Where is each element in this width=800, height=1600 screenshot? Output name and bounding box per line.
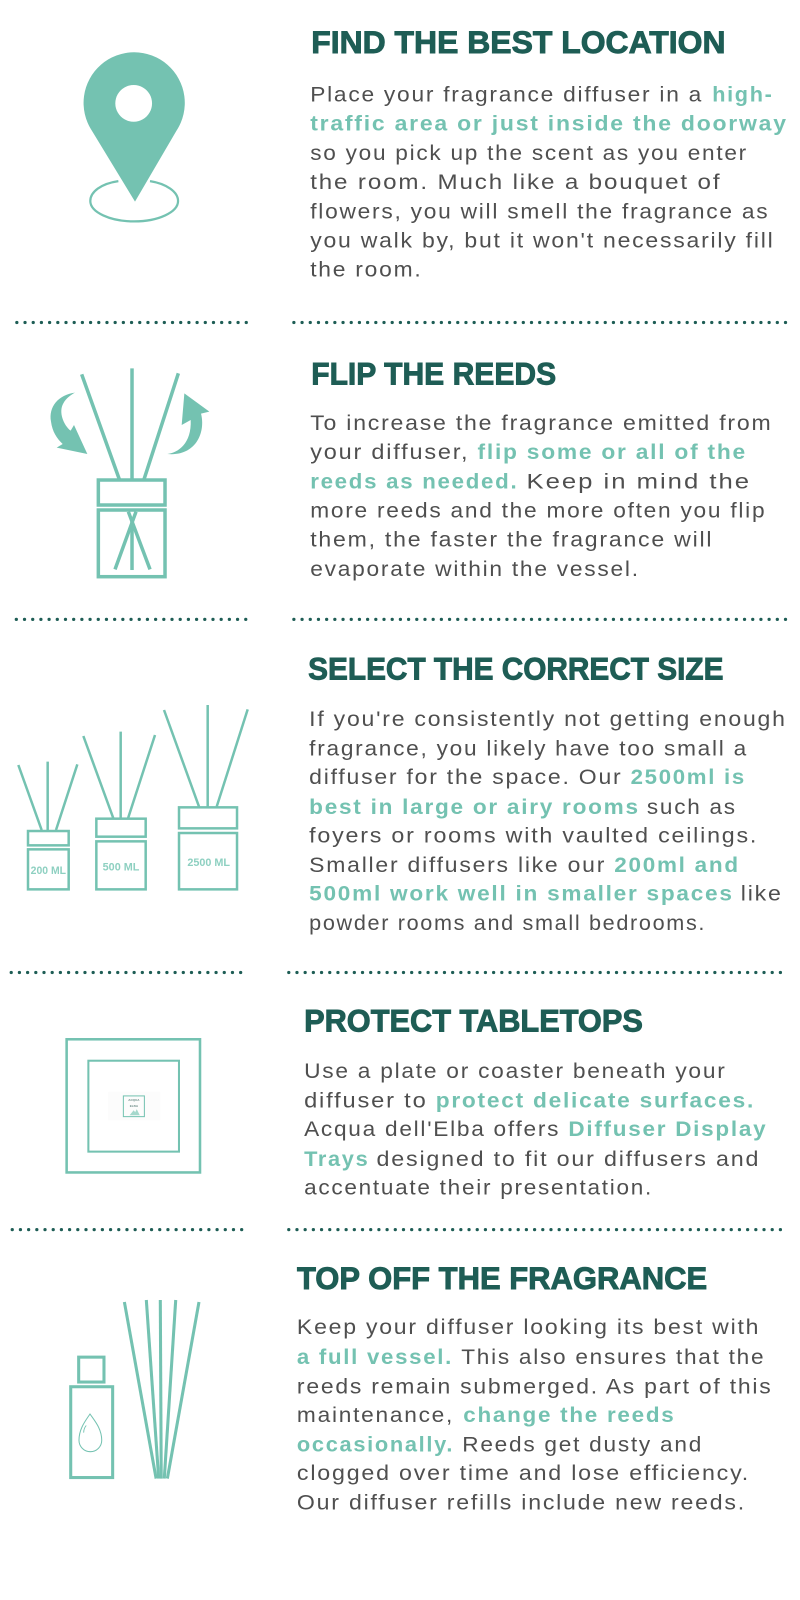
text block: foyers or rooms with vaulted ceilings.: [309, 824, 758, 847]
text block: maintenance,: [297, 1404, 454, 1427]
icon: arrow down: [51, 393, 87, 454]
text block: flowers, you will smell the fragrance as: [310, 200, 769, 223]
text block: more reeds and the more often you flip: [310, 499, 766, 522]
text block: This also ensures that the: [461, 1346, 765, 1369]
text block: [309, 708, 787, 935]
text block: Diffuser Display: [568, 1118, 767, 1141]
text block: change the reeds: [463, 1404, 676, 1427]
text block: Keep your diffuser looking its best with: [297, 1316, 760, 1339]
text block: reeds as needed.: [310, 470, 518, 493]
text block: To increase the fragrance emitted from: [310, 412, 772, 435]
text block: protect delicate surfaces.: [436, 1090, 755, 1113]
icon: display tray: ELBA: [130, 1104, 139, 1108]
text block: them, the faster the fragrance will: [310, 528, 713, 551]
text block: Use a plate or coaster beneath your: [304, 1060, 727, 1083]
icon: location pin: [84, 52, 185, 221]
text block: flip some or all of the: [478, 441, 747, 464]
icon: diffuser with flip arrows: [51, 368, 209, 577]
icon: three diffuser sizes: 200 ML: [31, 865, 66, 877]
text block: traffic area or just inside the doorway: [310, 113, 788, 136]
text block: best in large or airy rooms: [309, 796, 640, 819]
text block: such as: [647, 796, 737, 819]
text block: fragrance, you likely have too small a: [309, 738, 748, 761]
text block: [310, 412, 772, 581]
heading: PROTECT TABLETOPS: [304, 1003, 643, 1039]
panel: select the correct size: [18, 651, 787, 935]
text block: clogged over time and lose efficiency.: [297, 1462, 750, 1485]
text block: diffuser for the space. Our: [309, 766, 622, 789]
icon: three diffuser sizes: 2500 ML: [187, 857, 230, 869]
text block: Place your fragrance diffuser in a: [310, 84, 703, 107]
text block: 200ml and: [614, 854, 740, 877]
panel: top off the fragrance: [71, 1260, 772, 1515]
text block: evaporate within the vessel.: [310, 558, 640, 581]
text block: [304, 1060, 767, 1199]
text block: designed to fit our diffusers and: [377, 1148, 760, 1171]
text block: [310, 84, 788, 282]
text block: like: [741, 883, 783, 906]
text block: 2500ml is: [631, 766, 746, 789]
panel: find the best location: [84, 24, 788, 282]
text block: 500ml work well in smaller spaces: [309, 883, 734, 906]
text block: Keep in mind the: [527, 470, 751, 493]
icon: three diffuser sizes: [18, 705, 248, 889]
icon: refill bottle and reeds: [71, 1300, 199, 1479]
icon: three diffuser sizes: 500 ML: [103, 861, 140, 873]
panel: protect tabletops: [67, 1003, 767, 1199]
panel: flip the reeds: [51, 356, 772, 581]
text block: occasionally.: [297, 1434, 454, 1457]
text block: powder rooms and small bedrooms.: [309, 912, 706, 935]
text block: If you're consistently not getting enough: [309, 708, 787, 731]
text block: your diffuser,: [310, 441, 469, 464]
text block: Smaller diffusers like our: [309, 854, 606, 877]
text block: [297, 1316, 772, 1515]
text block: Acqua dell'Elba offers: [304, 1118, 560, 1141]
heading: FLIP THE REEDS: [311, 356, 556, 392]
text block: Our diffuser refills include new reeds.: [297, 1492, 746, 1515]
text block: Trays: [304, 1148, 369, 1171]
text block: the room.: [310, 259, 422, 282]
heading: SELECT THE CORRECT SIZE: [308, 651, 723, 687]
text block: the room. Much like a bouquet of: [310, 171, 721, 194]
icon: display tray: ACQUA: [128, 1098, 140, 1102]
text block: a full vessel.: [297, 1346, 453, 1369]
heading: TOP OFF THE FRAGRANCE: [297, 1260, 707, 1296]
text block: diffuser to: [304, 1090, 428, 1113]
text block: Reeds get dusty and: [462, 1434, 703, 1457]
icon: display tray: [67, 1039, 200, 1172]
text block: reeds remain submerged. As part of this: [297, 1375, 772, 1398]
icon: arrow up: [167, 393, 209, 454]
text block: you walk by, but it won't necessarily fill: [310, 230, 774, 253]
text block: accentuate their presentation.: [304, 1176, 653, 1199]
text block: so you pick up the scent as you enter: [310, 142, 748, 165]
heading: FIND THE BEST LOCATION: [311, 24, 726, 60]
text block: high-: [712, 84, 773, 107]
